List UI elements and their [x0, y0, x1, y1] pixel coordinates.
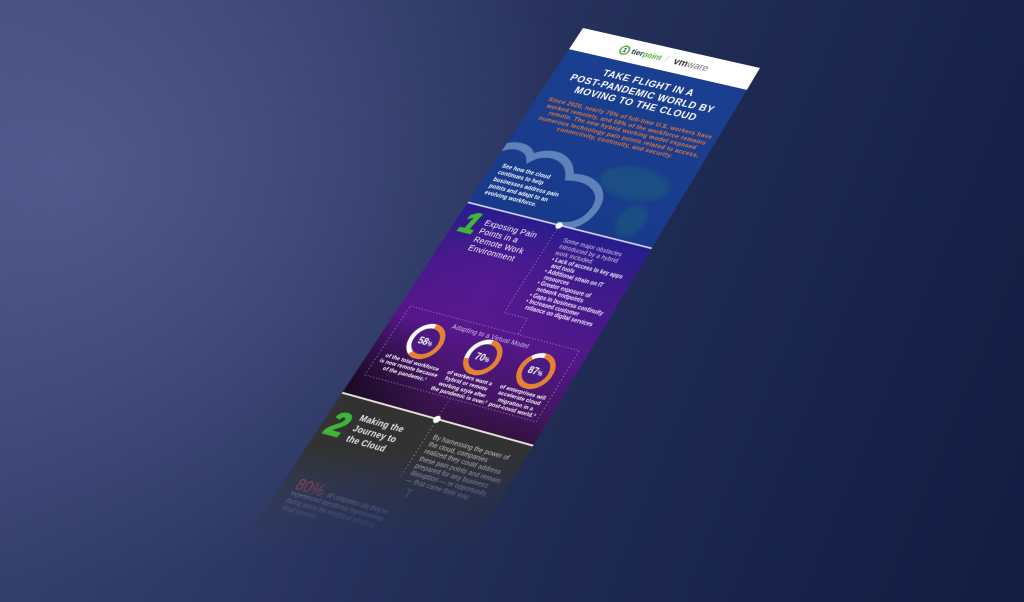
title: POST-PANDEMIC WORLD BY — [568, 72, 717, 115]
obstacles intro text: work included: — [554, 250, 595, 266]
section 2 body text: realized they could address — [422, 448, 503, 476]
stat caption 3: migration in a — [496, 396, 535, 412]
section 2 heading: Journey to — [350, 423, 399, 445]
section 2 body text: these pain points and remain — [418, 455, 503, 485]
cloud caption: evolving workforce. — [483, 189, 538, 208]
stat text: 80 percent: experienced operational improvements — [289, 490, 385, 523]
intro paragraph: remote. The new hybrid working model exposed — [547, 109, 699, 151]
section 2 body text: By harnessing the power of — [431, 434, 511, 462]
number 1: 1 — [453, 206, 488, 240]
panel: blue intro — [468, 49, 747, 249]
icon: faint server symbol: T — [400, 487, 415, 502]
stat caption 3: accelerate cloud — [496, 390, 542, 407]
intro paragraph: numerous technology pain points related to access, — [537, 114, 701, 159]
stat caption 3: of enterprises will — [498, 383, 547, 402]
obstacles bullet list — [429, 191, 624, 357]
obstacles bullet list: network endpoints — [535, 287, 585, 305]
title: MOVING TO THE CLOUD — [572, 85, 699, 123]
stat text: 80 percent: of companies say they've — [325, 492, 390, 516]
section 1 top rule — [467, 202, 652, 249]
panel: section 1 purple — [342, 203, 652, 446]
title: TAKE FLIGHT IN A — [600, 68, 697, 99]
intro paragraph: Since 2020, nearly 70% of full-time U.S. workers have — [547, 95, 714, 141]
stat: 80 percent: 80% — [292, 476, 329, 500]
section 2 divider — [400, 422, 436, 478]
section 1 heading: Remote Work — [471, 235, 526, 256]
donut chart: 70%: 70% — [472, 350, 490, 365]
section 2 heading: Making the — [357, 413, 407, 435]
logo divider slash: / — [663, 55, 670, 63]
stat caption 1: of the total workforce — [384, 352, 441, 373]
panel: white logo header — [569, 28, 760, 90]
section 2 body text: — that came their way. — [404, 476, 472, 502]
intro paragraph: connectivity, continuity, and security. — [555, 125, 675, 159]
icon: tierpoint logo mark — [618, 45, 631, 56]
cloud caption: businesses address pain — [492, 176, 561, 198]
obstacles bullet list: • Greater exposure of — [535, 280, 592, 300]
section 1 heading: Exposing Pain — [482, 218, 540, 240]
section 2 heading — [346, 414, 404, 452]
stat caption 1: is now remote because — [378, 358, 439, 379]
section 2 top rule — [342, 392, 534, 447]
cloud caption — [484, 163, 559, 206]
stat caption 1: of the pandemic.¹ — [381, 365, 428, 383]
stat caption 2: of workers want a — [446, 369, 494, 387]
icon: cloud outline — [502, 142, 604, 228]
donut chart: 87% — [516, 352, 556, 390]
section 1 heading — [429, 191, 603, 357]
stat caption 2: hybrid or remote — [443, 375, 489, 393]
section 1 heading: Points in a — [477, 227, 521, 245]
obstacles intro text — [429, 191, 622, 357]
donut chart: 58% — [406, 324, 446, 360]
stat caption 2: the pandemic is over.² — [429, 385, 488, 407]
intro paragraph — [538, 97, 712, 158]
section 2 body text: prepared for any business — [413, 462, 490, 490]
stats heading: Adapting to a Virtual Model — [450, 323, 531, 350]
section 2 node dot — [432, 416, 442, 424]
obstacles bullet list: • Lack of access to key apps — [550, 257, 624, 280]
tierpoint logo text: tierpoint — [629, 48, 664, 62]
obstacles bullet list: resources — [542, 275, 570, 287]
cloud caption: continues to help — [496, 169, 545, 186]
stat text: 80 percent: during and in the months of adopting — [284, 497, 375, 529]
obstacles bullet list: reliance on digital services — [523, 305, 594, 328]
stat caption 2: working style after — [437, 380, 488, 399]
obstacles bullet list: • Additional strain on IT — [543, 268, 604, 289]
map: globe continents — [600, 166, 670, 237]
section 1 heading: Environment — [466, 243, 517, 264]
section 2 body text: disruption — or opportunity — [409, 469, 488, 498]
vmware logo text: vmware — [671, 56, 711, 74]
infographic page — [260, 28, 760, 528]
obstacles bullet list: and tools — [549, 263, 576, 275]
panel: section 2 dark — [260, 394, 532, 520]
donut chart: 58%: 58% — [415, 335, 433, 349]
stat caption 3: post-covid world.³ — [487, 401, 537, 420]
cloud caption: points and adapt to an — [487, 183, 550, 203]
stat caption 3 — [488, 384, 547, 418]
stat text: 80 percent: cloud services. — [279, 504, 319, 521]
number 2: 2 — [319, 404, 359, 444]
obstacles intro text: introduced by a hybrid — [558, 243, 620, 264]
section 2 body text: the cloud, companies — [427, 441, 490, 464]
intro paragraph: worked remotely, and 58% of the workforce remains — [545, 102, 708, 146]
obstacles bullet list: • Gaps in business continuity — [528, 292, 605, 317]
obstacles intro text: Some major obstacles — [561, 237, 624, 258]
dotted connectors and stats frame — [364, 191, 603, 422]
cloud caption: See how the cloud — [500, 163, 552, 180]
icon: tierpoint logo mark: 1 — [621, 47, 628, 54]
donut chart: 70% — [462, 339, 503, 376]
section 2 body text — [406, 434, 511, 500]
section 1 node dot — [555, 222, 564, 229]
stat caption 2 — [430, 370, 492, 404]
section 2 heading: the Cloud — [344, 434, 388, 454]
obstacles bullet list: • Increased customer — [524, 298, 581, 317]
donut chart: 87%: 87% — [526, 364, 544, 378]
